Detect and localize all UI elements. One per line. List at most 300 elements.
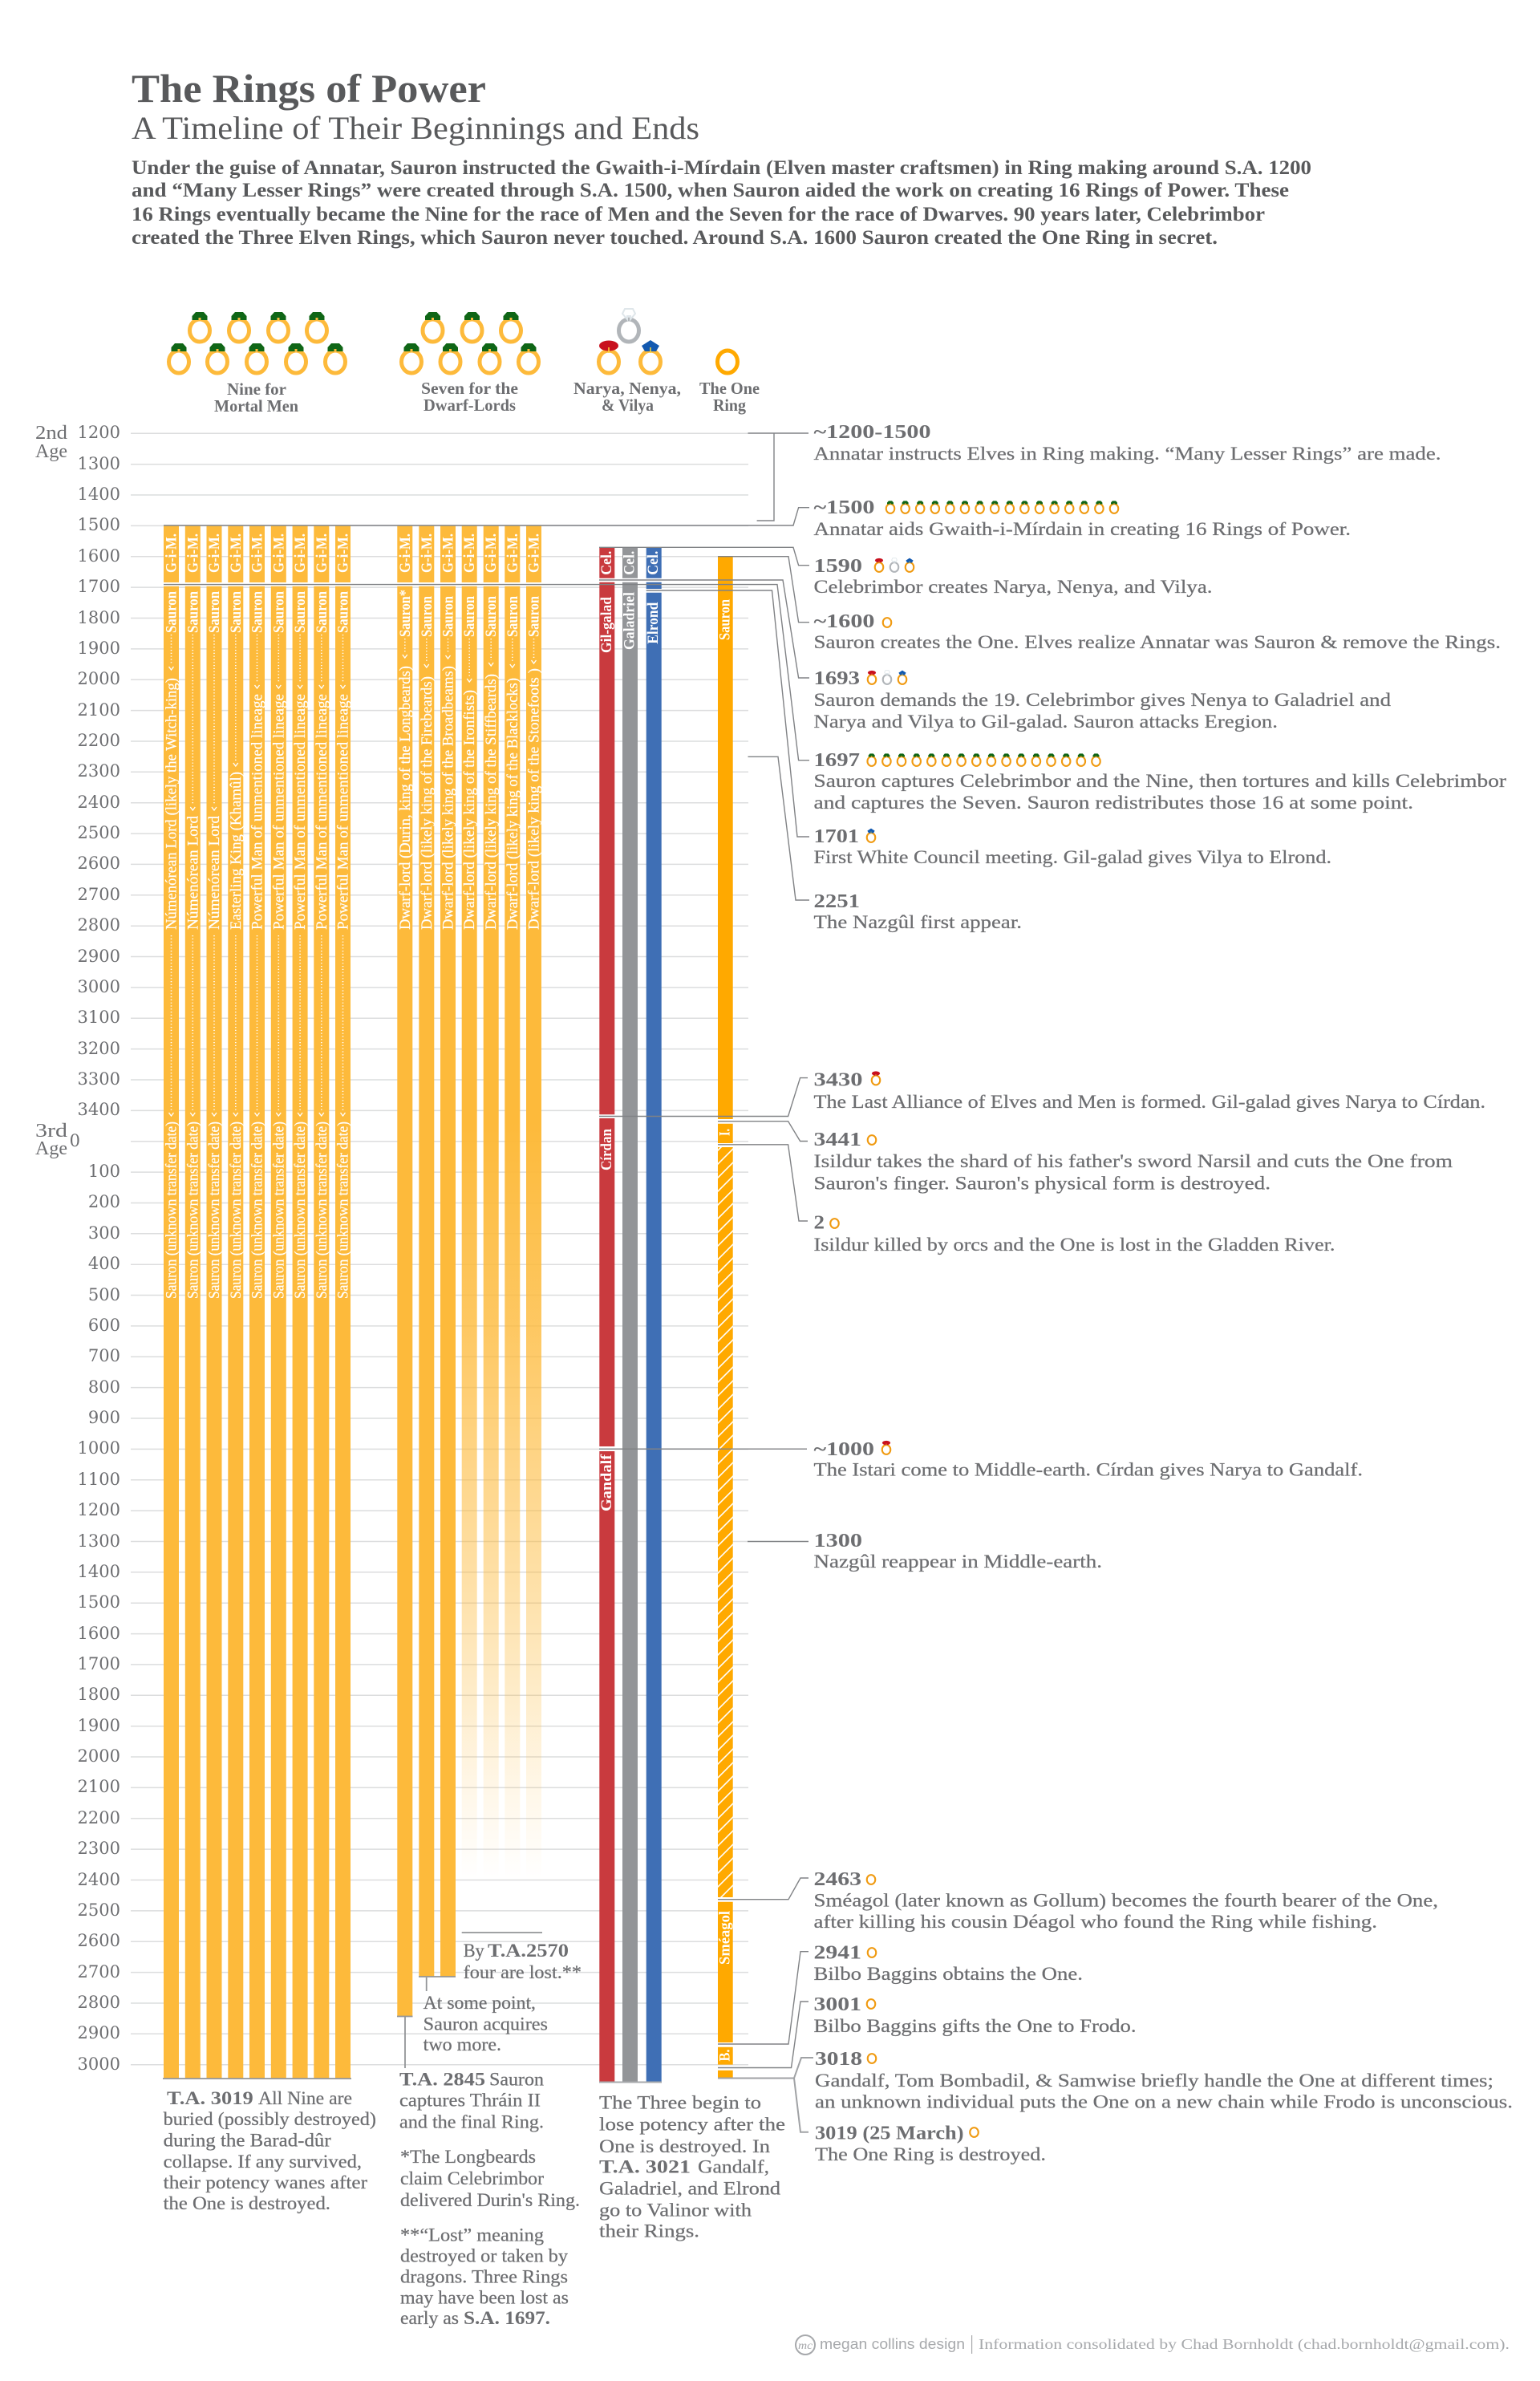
bar: Narya: Gil-galad	[598, 597, 615, 653]
note: T.A. 2845: captures Thráin II	[399, 2091, 541, 2110]
bar: nine ring 2: G-i-M.	[184, 533, 201, 573]
icons: three rings	[868, 671, 906, 684]
note: the three: go to Valinor with	[599, 2200, 752, 2220]
bar: Narya: Gandalf	[598, 1454, 615, 1511]
axis: year labels: 1400	[78, 485, 120, 504]
bar: Vilya: Cel.	[645, 551, 662, 575]
subtitle: A Timeline of Their Beginnings and Ends	[132, 110, 699, 146]
note: T.A. 2845: and the final Ring.	[399, 2111, 544, 2132]
bar: Firebeards ring: Dwarf-lord (likely king of the Firebeards)	[419, 676, 436, 930]
note: at some point	[424, 1993, 548, 2054]
panel: seven rings bars	[397, 526, 542, 2017]
note: fate of the nine: T.A. 3019	[167, 2088, 253, 2108]
bar: nine ring 4: Sauron	[228, 591, 245, 633]
bar: Blacklocks ring: Dwarf-lord (likely king of the Blacklocks)	[505, 678, 521, 930]
note: at some point: two more.	[424, 2034, 501, 2054]
note: fate of the nine: All Nine are	[258, 2088, 352, 2108]
intro paragraph: and “Many Lesser Rings” were created through S.A. 1500, when Sauron aided the work on creating 16 Rings of Power. These	[132, 180, 1289, 201]
bar: nine ring 1: Sauron (unknown transfer date)	[164, 1122, 180, 1299]
axis: year labels: 3000	[78, 2054, 120, 2074]
bar: Stonefoots ring	[526, 526, 542, 1879]
connector: 1697	[164, 585, 809, 761]
event: 3441: Isildur takes the shard of his father's sword Narsil and cuts the One from	[813, 1151, 1453, 1172]
event: 1300	[813, 1531, 1102, 1572]
bar: nine ring 1: Sauron	[164, 591, 180, 633]
axis: year labels: 1200	[78, 1500, 120, 1519]
bar: Broadbeams ring: Dwarf-lord (likely king of the Broadbeams)	[440, 666, 457, 930]
note: the three: The Three begin to	[599, 2092, 761, 2112]
event: ~1200-1500: ~1200-1500	[813, 422, 930, 443]
axis: year labels: 100	[88, 1162, 120, 1181]
axis: year labels: 3300	[78, 1069, 120, 1089]
event: 3019: The One Ring is destroyed.	[815, 2144, 1046, 2165]
bar: nine ring 3: Sauron (unknown transfer date)	[206, 1122, 223, 1299]
bar: Nenya	[621, 548, 638, 2082]
event: 2941: Bilbo Baggins obtains the One.	[813, 1964, 1083, 1985]
event: ~1500: ~1500	[813, 497, 874, 518]
footnote: lost meaning	[400, 2225, 569, 2328]
icon: designer logo: mc	[798, 2340, 813, 2352]
intro paragraph: created the Three Elven Rings, which Sauron never touched. Around S.A. 1600 Sauron created the One Ring in secret.	[132, 227, 1218, 249]
event: ~1000: The Istari come to Middle-earth. Círdan gives Narya to Gandalf.	[813, 1460, 1363, 1481]
axis: year labels: 0	[70, 1131, 80, 1150]
event: ~1500: Annatar aids Gwaith-i-Mírdain in creating 16 Rings of Power.	[813, 519, 1351, 540]
bar: nine ring 3: G-i-M.	[206, 533, 223, 573]
event: 3441: 3441	[813, 1130, 861, 1150]
axis: year labels: 2400	[78, 1870, 120, 1889]
intro paragraph	[132, 157, 1311, 249]
bar: nine ring 7: Powerful Man of unmentioned lineage	[292, 694, 309, 930]
note: by T.A. 2570	[464, 1941, 582, 1982]
bar: nine ring 8	[314, 526, 330, 2079]
event: 2: Isildur killed by orcs and the One is lost in the Gladden River.	[813, 1235, 1335, 1255]
axis: year labels: 2400	[78, 793, 120, 812]
icons: three rings	[875, 558, 914, 572]
bar: nine ring 7: Sauron (unknown transfer date)	[292, 1122, 309, 1299]
legend: nine rings icons	[168, 312, 345, 373]
event: 2: 2	[813, 1213, 825, 1234]
connector: 1693	[599, 580, 809, 678]
bar: nine ring 9: G-i-M.	[335, 533, 351, 573]
bar: Narya: Cel.	[598, 551, 615, 575]
axis: year labels: 1800	[78, 608, 120, 627]
event: 1701: First White Council meeting. Gil-galad gives Vilya to Elrond.	[813, 847, 1331, 868]
bar: nine ring 4: Easterling King (Khamûl)	[228, 772, 245, 930]
axis: year labels: 2100	[78, 700, 120, 720]
note: at some point: Sauron acquires	[424, 2014, 548, 2034]
legend label: nine	[214, 379, 298, 416]
bar: Firebeards ring: Sauron	[419, 596, 436, 637]
axis: year labels: 2300	[78, 1839, 120, 1858]
axis: year labels: 1600	[78, 1624, 120, 1643]
axis: year labels: 2100	[78, 1777, 120, 1796]
note: by T.A. 2570: four are lost.**	[464, 1962, 582, 1982]
bar end lines	[163, 1933, 662, 2083]
axis: year labels: 900	[88, 1408, 120, 1427]
axis: year labels: 2800	[78, 1993, 120, 2012]
bar: nine ring 3	[206, 526, 223, 2079]
bar: Vilya: Elrond	[645, 602, 662, 644]
bar: nine ring 6: Powerful Man of unmentioned lineage	[270, 694, 287, 930]
axis: year labels: 3100	[78, 1008, 120, 1027]
note: fate of the nine: collapse. If any survived,	[164, 2152, 362, 2172]
note: the three: lose potency after the	[599, 2114, 785, 2134]
bar: Ironfists ring: G-i-M.	[461, 533, 478, 573]
event: 1300: 1300	[813, 1531, 862, 1552]
connector: 1590	[599, 547, 809, 566]
axis: year labels: 2300	[78, 761, 120, 781]
legend label: nine: Nine for	[227, 379, 286, 399]
axis: age labels: Age	[35, 441, 67, 462]
connector: ~1600	[718, 557, 809, 623]
note: T.A. 2845: Sauron	[489, 2069, 545, 2089]
legend label: one	[699, 379, 760, 415]
connector: 1701	[646, 590, 809, 837]
icon: one ring	[867, 1999, 875, 2009]
footnote: lost meaning: S.A. 1697.	[464, 2308, 550, 2328]
bar: Stiffbeards ring: G-i-M.	[483, 533, 500, 573]
icons: sixteen rings	[867, 753, 1100, 766]
legend label: seven: Dwarf-Lords	[424, 395, 516, 415]
axis: year labels: 3400	[78, 1100, 120, 1119]
event: 1697: Sauron captures Celebrimbor and the Nine, then tortures and kills Celebrimbor	[813, 771, 1506, 792]
footnote: Longbeards: claim Celebrimbor	[400, 2168, 544, 2188]
bar: Durin's ring: Dwarf-lord (Durin, king of the Longbeards)	[397, 666, 414, 930]
bar: Ironfists ring: Sauron	[461, 596, 478, 637]
axis: year labels: 1400	[78, 1562, 120, 1581]
connector: ~1500	[164, 508, 809, 525]
bar: Stonefoots ring: G-i-M.	[526, 533, 542, 573]
icon: designer logo	[796, 2335, 815, 2355]
note: the three: Galadriel, and Elrond	[599, 2179, 781, 2198]
axis: age labels	[35, 423, 67, 1159]
footer credit	[796, 2335, 1510, 2355]
note: fate of the nine	[164, 2088, 376, 2213]
event: ~1000	[813, 1439, 1363, 1481]
legend label: seven: Seven for the	[421, 379, 518, 398]
legend: three elven rings icons	[598, 309, 661, 373]
axis: year labels: 2000	[78, 1746, 120, 1766]
event: 1697	[813, 750, 1506, 813]
intro paragraph: 16 Rings eventually became the Nine for the race of Men and the Seven for the race of Dwarves. 90 years later, Celebrimbor	[132, 204, 1265, 225]
event: 1693	[813, 668, 1391, 732]
event: 2	[813, 1213, 1335, 1255]
footer credit: megan collins design	[820, 2336, 965, 2352]
footnote: Longbeards: delivered Durin's Ring.	[400, 2190, 580, 2210]
event: 1590	[813, 556, 1213, 598]
event: 3001	[813, 1994, 1136, 2037]
bar: Broadbeams ring	[440, 526, 457, 1977]
bar: Durin's ring: G-i-M.	[397, 533, 414, 573]
note: the three: Gandalf,	[698, 2156, 769, 2177]
axis: year labels: 1300	[78, 454, 120, 473]
panel: one ring bar: Sméagol	[717, 1911, 733, 1965]
bar: nine ring 4: G-i-M.	[228, 533, 245, 573]
panel: one ring bar: I.	[717, 1129, 733, 1136]
connector: 2	[718, 1145, 808, 1221]
bar: Firebeards ring	[419, 526, 436, 1977]
bar: nine ring 6	[270, 526, 287, 2079]
note: fate of the nine: buried (possibly destroyed)	[164, 2109, 376, 2129]
bar: Blacklocks ring	[505, 526, 521, 1879]
icon: one ring	[868, 2054, 876, 2063]
note: T.A. 2845	[399, 2069, 545, 2132]
bar: nine ring 5	[249, 526, 266, 2079]
legend label: three	[573, 379, 681, 415]
connector: 1300	[748, 1540, 808, 1542]
note: the three	[599, 2092, 785, 2241]
footnote: Longbeards: *The Longbeards	[400, 2147, 536, 2167]
event: ~1200-1500: Annatar instructs Elves in Ring making. “Many Lesser Rings” are made.	[813, 444, 1441, 464]
icon: blue ring	[867, 829, 875, 842]
panel: three elven rings bars	[598, 548, 662, 2082]
event: 3430: 3430	[813, 1070, 863, 1091]
note: fate of the nine: during the Barad-dûr	[164, 2131, 331, 2151]
axis: age labels: Age	[35, 1138, 67, 1159]
bar: nine ring 2: Sauron	[184, 591, 201, 633]
bar: Blacklocks ring: G-i-M.	[505, 533, 521, 573]
bar: nine ring 6: G-i-M.	[270, 533, 287, 573]
icon: one ring	[868, 1948, 876, 1957]
event: 3018: Gandalf, Tom Bombadil, & Samwise briefly handle the One at different times;	[815, 2071, 1493, 2091]
axis: year labels: 2700	[78, 1962, 120, 1981]
panel: one ring bar: B.	[717, 2049, 733, 2062]
bar: nine ring 8: G-i-M.	[314, 533, 330, 573]
event: 3441: Sauron's finger. Sauron's physical form is destroyed.	[813, 1173, 1270, 1194]
bar: nine ring 6: Sauron (unknown transfer date)	[270, 1122, 287, 1299]
event: ~1600: Sauron creates the One. Elves realize Annatar was Sauron & remove the Rings.	[813, 632, 1501, 653]
axis: year labels: 3200	[78, 1039, 120, 1058]
axis: year labels: 2000	[78, 669, 120, 688]
bar: nine ring 5: Sauron	[249, 591, 266, 633]
bar: Stonefoots ring: Sauron	[526, 596, 542, 637]
legend label: seven	[421, 379, 518, 415]
icon: one ring	[867, 1875, 875, 1884]
bar: nine ring 8: Sauron	[314, 591, 330, 633]
event: 3430	[813, 1070, 1485, 1113]
axis: year labels: 3000	[78, 977, 120, 996]
axis: year labels: 1600	[78, 546, 120, 566]
axis: year labels: 1900	[78, 1716, 120, 1735]
event: 2463	[813, 1869, 1438, 1933]
panel: nine rings bars	[164, 526, 351, 2079]
bar: Ironfists ring: Dwarf-lord (likely king of the Ironfists)	[461, 690, 478, 930]
axis: year labels: 1800	[78, 1685, 120, 1704]
icon: one ring	[830, 1219, 839, 1228]
panel: one ring bar	[717, 557, 733, 2078]
event: 1693: 1693	[813, 668, 860, 689]
footnote: lost meaning: early as	[400, 2308, 459, 2328]
legend label: three: Narya, Nenya,	[573, 379, 681, 398]
bar: nine ring 9: Sauron (unknown transfer date)	[335, 1122, 351, 1299]
icons: sixteen rings	[886, 501, 1118, 513]
bar: nine ring 6: Sauron	[270, 591, 287, 633]
icon: red ring	[882, 1441, 890, 1454]
axis: year labels: 2800	[78, 915, 120, 935]
bar: Ironfists ring	[461, 526, 478, 1879]
bar: Firebeards ring: G-i-M.	[419, 533, 436, 573]
event: 1701: 1701	[813, 826, 859, 847]
bar: nine ring 2: Númenórean Lord	[184, 815, 201, 930]
bar: Stiffbeards ring	[483, 526, 500, 1879]
bar: nine ring 9: Sauron	[335, 591, 351, 633]
event: 3018: 3018	[815, 2049, 862, 2070]
bar: Durin's ring	[397, 526, 414, 2017]
axis: year labels: 2500	[78, 1900, 120, 1920]
bar: Narya	[598, 548, 615, 2082]
bar: nine ring 5: Powerful Man of unmentioned lineage	[249, 694, 266, 930]
event: 3430: The Last Alliance of Elves and Men is formed. Gil-galad gives Narya to Círdan.	[813, 1092, 1485, 1113]
bar: nine ring 7: Sauron	[292, 591, 309, 633]
axis: year labels: 1100	[78, 1470, 120, 1489]
connector: 3430	[599, 1078, 808, 1117]
axis: age labels: 3rd	[35, 1121, 67, 1142]
event: ~1500	[813, 497, 1351, 540]
bar: Stiffbeards ring: Sauron	[483, 596, 500, 637]
axis: year labels: 2900	[78, 947, 120, 966]
bar: nine ring 7: G-i-M.	[292, 533, 309, 573]
event: 1697: and captures the Seven. Sauron redistributes those 16 at some point.	[813, 793, 1413, 813]
event: 2463: after killing his cousin Déagol who found the Ring while fishing.	[813, 1912, 1377, 1933]
icon: one ring	[970, 2127, 979, 2137]
icon: one ring	[883, 618, 891, 627]
axis: year labels: 2600	[78, 854, 120, 873]
axis: year labels: 2200	[78, 1808, 120, 1827]
note: the three: their Rings.	[599, 2221, 699, 2241]
event: 2463: Sméagol (later known as Gollum) becomes the fourth bearer of the One,	[813, 1891, 1438, 1912]
axis: year labels: 1500	[78, 515, 120, 534]
axis: year labels: 600	[88, 1316, 120, 1335]
bar: Blacklocks ring: Sauron	[505, 596, 521, 637]
connector: 3018 and 3019	[718, 2058, 813, 2132]
connector: ~1000	[599, 1448, 807, 1450]
note: the three: T.A. 3021	[599, 2156, 691, 2177]
footnote: lost meaning: **“Lost” meaning	[400, 2225, 545, 2245]
event: 1300: Nazgûl reappear in Middle-earth.	[813, 1552, 1102, 1572]
bar: nine ring 9	[335, 526, 351, 2079]
axis: year labels: 200	[88, 1192, 120, 1211]
axis: year labels: 700	[88, 1346, 120, 1365]
bar: nine ring 8: Sauron (unknown transfer date)	[314, 1122, 330, 1299]
axis: year labels: 400	[88, 1254, 120, 1273]
intro paragraph: Under the guise of Annatar, Sauron instructed the Gwaith-i-Mírdain (Elven master craftsmen) in Ring making around S.A. 1200	[132, 157, 1311, 179]
event: 1693: Sauron demands the 19. Celebrimbor gives Nenya to Galadriel and	[813, 690, 1391, 711]
bar: nine ring 5: G-i-M.	[249, 533, 266, 573]
bar: Narya: Círdan	[598, 1129, 615, 1170]
axis: year labels: 1000	[78, 1438, 120, 1458]
connector: 3441	[718, 1122, 808, 1141]
connector: 2463	[718, 1878, 808, 1900]
axis: year labels: 2900	[78, 2023, 120, 2042]
bar: Broadbeams ring: Sauron	[440, 596, 457, 637]
footnote: Longbeards	[400, 2147, 580, 2210]
event: 1590: 1590	[813, 556, 862, 577]
event: ~1600: ~1600	[813, 611, 874, 632]
panel: one ring bar: Sauron	[717, 599, 733, 640]
event: 3441	[813, 1130, 1453, 1194]
bar: nine ring 8: Powerful Man of unmentioned lineage	[314, 694, 330, 930]
legend label: three: & Vilya	[602, 395, 654, 415]
axis: year labels: 2600	[78, 1931, 120, 1950]
connector: 2941	[718, 1952, 808, 2044]
event: 3019	[815, 2123, 1046, 2165]
event: 2941	[813, 1943, 1083, 1985]
axis: year labels: 1500	[78, 1592, 120, 1612]
bar: nine ring 4	[228, 526, 245, 2079]
bar: nine ring 9: Powerful Man of unmentioned lineage	[335, 694, 351, 930]
axis: year labels: 300	[88, 1223, 120, 1243]
event: 2941: 2941	[813, 1943, 861, 1964]
bar: nine ring 4: Sauron (unknown transfer date)	[228, 1122, 245, 1299]
footnote: lost meaning: dragons. Three Rings	[400, 2266, 568, 2286]
note: T.A. 2845: T.A. 2845	[399, 2069, 485, 2089]
axis: year labels: 1900	[78, 639, 120, 658]
event: 3001: Bilbo Baggins gifts the One to Frodo.	[813, 2016, 1136, 2037]
note: the three: One is destroyed. In	[599, 2136, 771, 2156]
bar: nine ring 1: G-i-M.	[164, 533, 180, 573]
event: 3019: 3019 (25 March)	[815, 2123, 964, 2144]
bar: Stiffbeards ring: Dwarf-lord (likely king of the Stiffbeards)	[483, 674, 500, 930]
bar: nine ring 3: Sauron	[206, 591, 223, 633]
event: 2251	[813, 891, 1022, 933]
legend: seven rings icons	[401, 312, 539, 373]
event: 1701	[813, 826, 1331, 868]
bar: Durin's ring: Sauron*	[397, 590, 414, 637]
axis: year labels: 1300	[78, 1531, 120, 1551]
bar: nine ring 1: Númenórean Lord (likely the Witch-king)	[164, 678, 180, 930]
axis: age labels: 2nd	[35, 423, 67, 444]
event: 1590: Celebrimbor creates Narya, Nenya, and Vilya.	[813, 577, 1213, 598]
bar: Nenya: Galadriel	[621, 592, 638, 650]
event: ~1000: ~1000	[813, 1439, 874, 1460]
event: 3018: an unknown individual puts the One on a new chain while Frodo is unconscious.	[815, 2092, 1513, 2113]
bar: nine ring 1	[164, 526, 180, 2079]
note: fate of the nine: the One is destroyed.	[164, 2193, 330, 2213]
event: ~1600	[813, 611, 1501, 653]
event: 3001: 3001	[813, 1994, 861, 2015]
axis: year labels	[70, 423, 120, 2074]
bar: Broadbeams ring: G-i-M.	[440, 533, 457, 573]
icon: red ring	[872, 1071, 880, 1085]
bar: Stonefoots ring: Dwarf-lord (likely king of the Stonefoots )	[526, 668, 542, 930]
legend label: one: The One	[699, 379, 760, 398]
event: ~1200-1500	[813, 422, 1441, 464]
event: 3018	[815, 2049, 1513, 2113]
footnote: lost meaning: destroyed or taken by	[400, 2246, 569, 2266]
bar: nine ring 3: Númenórean Lord	[206, 815, 223, 930]
axis: year labels: 800	[88, 1377, 120, 1397]
icon: one ring	[868, 1135, 876, 1145]
footnote: lost meaning: may have been lost as	[400, 2288, 569, 2308]
connector: ~1200-1500	[748, 433, 808, 521]
axis: year labels: 2700	[78, 885, 120, 904]
footer credit: Information consolidated by Chad Bornholdt (chad.bornholdt@gmail.com).	[979, 2336, 1510, 2353]
legend label: one: Ring	[713, 395, 746, 415]
connector: 2251	[748, 756, 809, 900]
bar: Nenya: Cel.	[621, 551, 638, 575]
bar: Vilya	[645, 548, 662, 2082]
axis: year labels: 1200	[78, 423, 120, 442]
note: by T.A. 2570: T.A.2570	[488, 1941, 569, 1961]
legend label: nine: Mortal Men	[214, 396, 298, 416]
bar: nine ring 7	[292, 526, 309, 2079]
event: 1693: Narya and Vilya to Gil-galad. Sauron attacks Eregion.	[813, 712, 1278, 732]
event: 1697: 1697	[813, 750, 860, 771]
bar: nine ring 2: Sauron (unknown transfer date)	[184, 1122, 201, 1299]
bar: nine ring 2	[184, 526, 201, 2079]
bar: nine ring 5: Sauron (unknown transfer date)	[249, 1122, 266, 1299]
event: 2463: 2463	[813, 1869, 861, 1890]
